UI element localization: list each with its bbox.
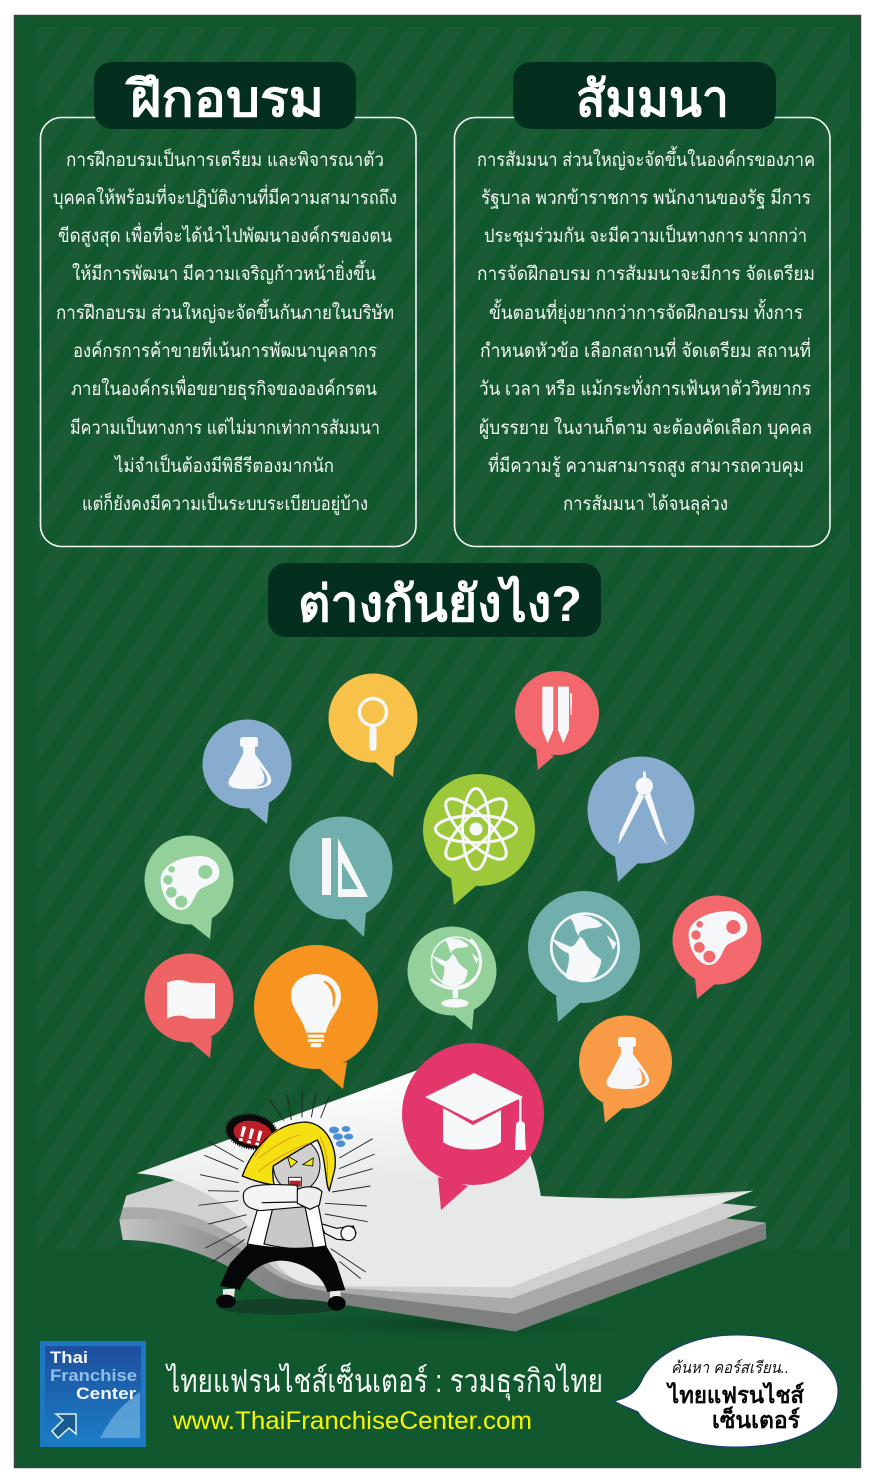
text block: สัมมนา: ที่มีความรู้ ความสามารถสูง สามารถควบคุม (488, 452, 804, 478)
text block: ฝึกอบรม: มีความเป็นทางการ แต่ไม่มากเท่าการสัมมนา (70, 415, 380, 439)
icon: magnifier (360, 698, 386, 751)
text block: ฝึกอบรม (53, 147, 397, 515)
text block: สัมมนา: การจัดฝึกอบรม การสัมมนาจะมีการ จัดเตรียม (477, 263, 815, 285)
callout: speech bubble (614, 1335, 838, 1447)
bubble: pens red (515, 671, 599, 770)
icon: ruler and set square (322, 838, 368, 897)
callout: speech bubble: ค้นหา คอร์สเรียน.. (671, 1358, 789, 1377)
character: shouting girl (199, 1091, 375, 1315)
logo: Thai Franchise Center: Thai (50, 1348, 88, 1367)
text block: ฝึกอบรม: การฝึกอบรมเป็นการเตรียม และพิจารณาตัว (66, 147, 384, 171)
text block: ฝึกอบรม: ขีดสูงสุด เพื่อที่จะได้นำไปพัฒนาองค์กรของตน (58, 222, 392, 248)
text block: ฝึกอบรม: บุคคลให้พร้อมที่จะปฏิบัติงานที่มีความสามารถถึง (53, 184, 397, 210)
bubble: flask blue (202, 720, 292, 824)
legs (216, 1244, 346, 1311)
text block: ฝึกอบรม: ภายในองค์กรเพื่อขยายธุรกิจขององค์กรตน (71, 375, 377, 401)
heading pill: สัมมนา: สัมมนา (576, 71, 729, 127)
callout: speech bubble: ไทยแฟรนไชส์ (665, 1381, 805, 1408)
text block: สัมมนา (477, 146, 815, 516)
bubble: atom green (423, 774, 535, 905)
ground shadow (218, 1299, 338, 1315)
illustration: open book (119, 1070, 766, 1332)
shout bubble (224, 1111, 280, 1152)
icon: open book (167, 980, 215, 1019)
bubble: rulers teal (290, 816, 392, 937)
icon: pens (542, 687, 572, 743)
arm and fist (243, 1185, 322, 1211)
heading pill: ฝึกอบรม: ฝึกอบรม (125, 71, 324, 127)
icon: compass (618, 772, 667, 845)
text block: สัมมนา: รัฐบาล พวกข้าราชการ พนักงานของรัฐ มีการ (481, 187, 811, 209)
icon: graduation cap (425, 1073, 526, 1150)
bubble: desk globe green (408, 926, 496, 1030)
logo: Thai Franchise Center (40, 1341, 146, 1447)
heading pill: ฝึกอบรม (94, 62, 356, 129)
bubble: palette green (144, 836, 234, 939)
bubble: magnifier yellow (328, 674, 418, 777)
text block: สัมมนา: วัน เวลา หรือ แม้กระทั่งการเฟ้นหาตัววิทยากร (479, 375, 811, 400)
bubble: book red (144, 954, 234, 1058)
bubble: palette red (672, 896, 762, 999)
heading pill: ต่างกันยังไง? (268, 563, 601, 637)
icon: light bulb (291, 974, 341, 1047)
footer url: www.ThaiFranchiseCenter.com (172, 1407, 532, 1435)
icon: earth (550, 912, 620, 982)
bubble: graduation cap pink (402, 1043, 544, 1210)
bubble: earth teal (528, 891, 640, 1022)
icon: atom (436, 788, 516, 870)
sweat drops (329, 1126, 353, 1147)
text block: ฝึกอบรม: แต่ก็ยังคงมีความเป็นระบบระเบียบอยู่บ้าง (82, 491, 368, 515)
hair and face (242, 1122, 335, 1192)
text block: ฝึกอบรม: ไม่จำเป็นต้องมีพิธีรีตองมากนัก (113, 453, 334, 477)
icon: flask (606, 1037, 649, 1089)
icon: desk globe (431, 937, 481, 1008)
icon: palette (689, 911, 747, 965)
icon: flask (228, 737, 271, 789)
text block: สัมมนา: กำหนดหัวข้อ เลือกสถานที่ จัดเตรียม สถานที่ (480, 337, 811, 362)
logo: Thai Franchise Center: Franchise (50, 1366, 137, 1385)
text block: ฝึกอบรม: องค์กรการค้าขายที่เน้นการพัฒนาบุคลากร (73, 337, 377, 363)
panel: สัมมนา (454, 62, 830, 546)
icon: palette (161, 856, 219, 910)
bubble: compass blue (588, 756, 694, 882)
text block: สัมมนา: ขั้นตอนที่ยุ่งยากกว่าการจัดฝึกอบรม ทั้งการ (489, 299, 803, 325)
shout bubble: !!! (235, 1121, 266, 1151)
text block: สัมมนา: ประชุมร่วมกัน จะมีความเป็นทางการ มากกว่า (484, 223, 807, 248)
footer title: ไทยแฟรนไชส์เซ็นเตอร์ : รวมธุรกิจไทย (165, 1362, 603, 1401)
heading pill: ต่างกันยังไง?: ต่างกันยังไง? (298, 575, 582, 632)
text block: สัมมนา: การสัมมนา ได้จนลุล่วง (563, 493, 728, 516)
bubble: flask orange (579, 1016, 672, 1123)
book shadow (220, 1307, 680, 1343)
text block: ฝึกอบรม: ให้มีการพัฒนา มีความเจริญก้าวหน้ายิ่งขึ้น (72, 260, 376, 285)
text block: สัมมนา: ผู้บรรยาย ในงานก็ตาม จะต้องคัดเลือก บุคคล (479, 415, 812, 440)
callout: speech bubble: เซ็นเตอร์ (712, 1405, 801, 1433)
bubble: bulb orange (254, 945, 378, 1089)
text block: ฝึกอบรม: การฝึกอบรม ส่วนใหญ่จะจัดขึ้นกันภายในบริษัท (56, 299, 394, 324)
heading pill: สัมมนา (513, 62, 776, 129)
panel: ฝึกอบรม (40, 62, 416, 546)
motion lines (199, 1091, 375, 1279)
icon: arrow (52, 1414, 76, 1438)
coat (247, 1205, 356, 1249)
logo: Thai Franchise Center: Center (76, 1384, 136, 1403)
text block: สัมมนา: การสัมมนา ส่วนใหญ่จะจัดขึ้นในองค์กรของภาค (477, 146, 815, 171)
